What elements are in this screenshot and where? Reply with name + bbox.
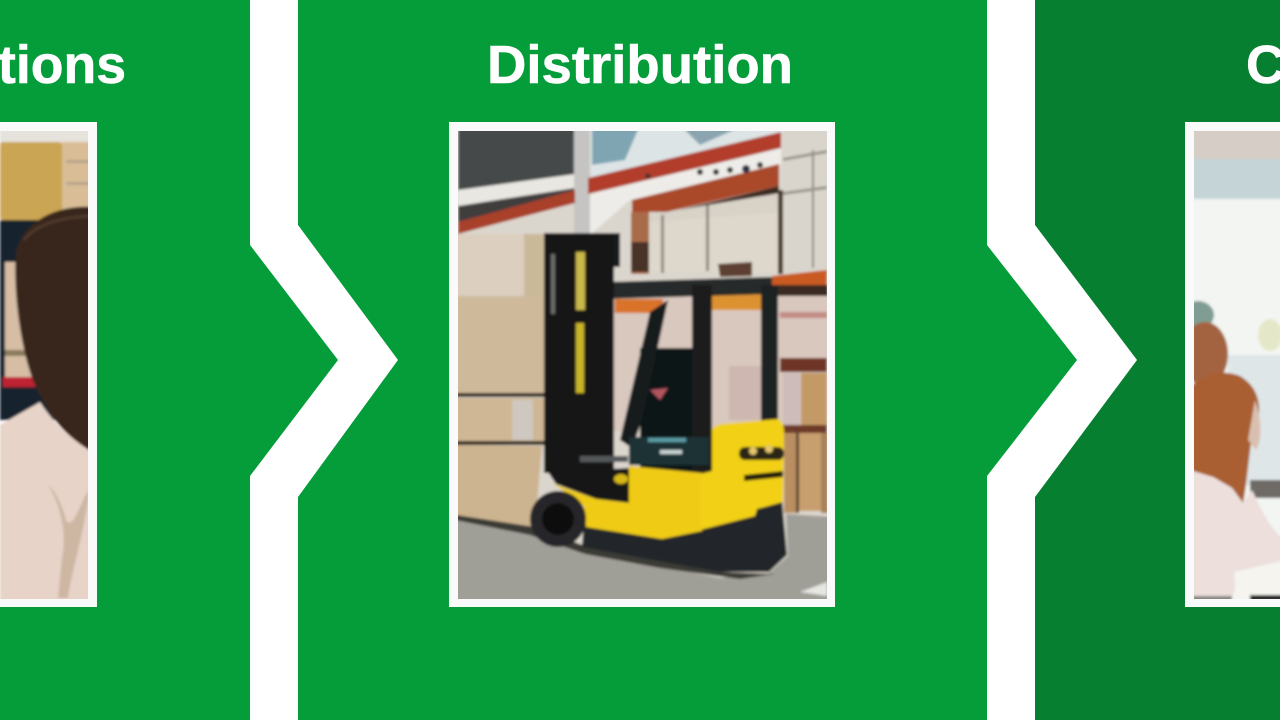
photo: forklift in warehouse — [449, 122, 835, 607]
yellow body — [554, 466, 702, 539]
photo: worker in warehouse — [0, 122, 97, 607]
mast — [612, 232, 622, 268]
fender — [548, 468, 630, 503]
floor — [450, 514, 835, 605]
panel: customer — [1035, 0, 1280, 720]
panel: distribution — [298, 0, 1077, 720]
heading: distribution: Distribution — [487, 35, 793, 95]
back racks — [610, 125, 828, 513]
heading: operations: tions — [0, 35, 126, 95]
panel: operations — [0, 0, 338, 720]
forklift — [530, 233, 787, 572]
ceiling and beams — [458, 125, 790, 235]
stacked pallets — [450, 234, 548, 527]
photo: office workers — [1182, 122, 1280, 607]
cab — [638, 346, 694, 474]
bumper — [582, 500, 787, 572]
wheel — [530, 491, 586, 547]
